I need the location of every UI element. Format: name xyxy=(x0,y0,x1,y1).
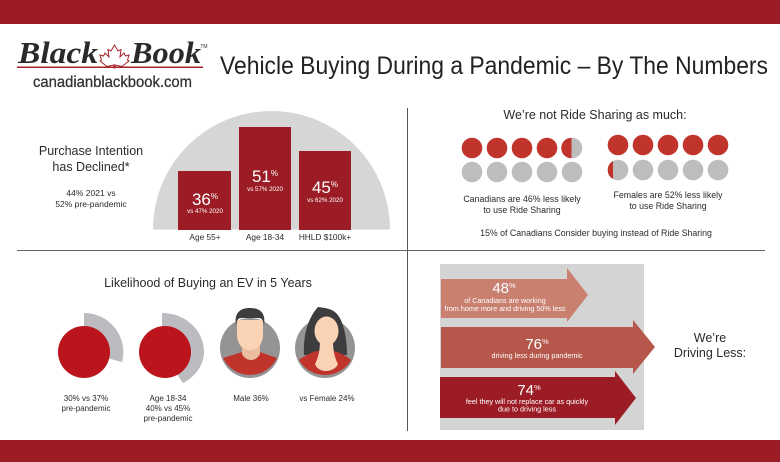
logo: canadianblackbook.com xyxy=(33,74,192,91)
heading: driving less xyxy=(674,331,746,360)
bar: age 18-34: vs 57% 2020 xyxy=(247,186,283,193)
icon: male avatar xyxy=(220,308,280,378)
logo: Book xyxy=(130,35,202,70)
panel: ride sharing xyxy=(462,108,728,238)
bar: age 55+: % xyxy=(211,192,218,201)
chart: age 18-34 40% xyxy=(139,313,204,383)
heading: purchase intention xyxy=(39,144,143,174)
text: female: vs Female 24% xyxy=(299,394,355,403)
heading: driving less: We’re xyxy=(694,331,726,345)
bar: age 18-34: % xyxy=(271,169,278,178)
text: age 18-34 EV: pre-pandemic xyxy=(144,414,192,423)
arrow: 74%: due to driving less xyxy=(498,404,556,414)
chart background: semicircle xyxy=(153,111,390,230)
text: Canadians ride sharing xyxy=(463,194,581,215)
arrow: 48%: from home more and driving 50% less xyxy=(444,304,566,313)
logo: Black xyxy=(17,35,99,70)
bar: HHLD $100k+ xyxy=(299,151,351,230)
panel: purchase intention xyxy=(39,111,390,242)
text: age 18-34 EV: Age 18-34 xyxy=(150,394,187,403)
text: overall EV xyxy=(62,394,110,413)
text: purchase intention detail: 52% pre-pandemic xyxy=(55,199,127,209)
heading: purchase intention: Purchase Intention xyxy=(39,144,143,158)
arrow: 74%: 74 xyxy=(517,382,534,399)
chart: overall 30% xyxy=(58,313,123,378)
text: consider buying: 15% of Canadians Consider buying instead of Ride Sharing xyxy=(480,228,712,238)
chart: Females dots xyxy=(608,135,728,180)
bar: age 55+: vs 47% 2020 xyxy=(187,208,223,215)
text: Females ride sharing: to use Ride Sharing xyxy=(629,201,707,211)
text: purchase intention detail: 44% 2021 vs xyxy=(66,188,116,198)
arrow: 76%: 76 xyxy=(525,336,542,353)
bar: age 55+: 36 xyxy=(192,190,211,209)
bar: HHLD $100k+: % xyxy=(331,180,338,189)
heading: purchase intention: has Declined* xyxy=(52,160,130,174)
bar: age 55+ xyxy=(178,171,231,230)
logo: TM xyxy=(200,44,208,50)
heading: EV likelihood: Likelihood of Buying an EV in 5 Years xyxy=(104,276,312,290)
logo xyxy=(17,35,208,91)
text: male: Male 36% xyxy=(233,394,269,403)
text: purchase intention detail xyxy=(55,188,127,209)
arrow: 48%: 48 xyxy=(492,280,509,297)
panel: driving less xyxy=(440,264,746,430)
icon: female avatar xyxy=(295,307,355,378)
arrow: 74%: % xyxy=(534,383,541,392)
bar: HHLD $100k+: 45 xyxy=(312,178,331,197)
text: overall EV: 30% vs 37% xyxy=(64,394,108,403)
text: Canadians ride sharing: Canadians are 46% less likely xyxy=(463,194,581,204)
bar labels: Age 55+ xyxy=(189,232,221,242)
text: age 18-34 EV xyxy=(144,394,192,423)
arrow: 74% xyxy=(440,371,636,425)
bar labels xyxy=(189,232,351,242)
bar labels: HHLD $100k+ xyxy=(299,232,351,242)
text: Females ride sharing xyxy=(613,190,723,211)
bottom banner xyxy=(0,440,780,462)
arrow: 76%: % xyxy=(542,337,549,346)
bar labels: Age 18-34 xyxy=(246,232,285,242)
top banner xyxy=(0,0,780,24)
arrow: 76% xyxy=(441,320,655,374)
heading: driving less: Driving Less: xyxy=(674,346,746,360)
chart: Canadians dots xyxy=(462,138,582,182)
bar: age 18-34: 51 xyxy=(252,167,271,186)
bar: age 18-34 xyxy=(239,127,291,230)
icon: maple leaf xyxy=(100,45,129,68)
arrow: 48%: % xyxy=(509,281,516,290)
arrow: 48% xyxy=(441,268,588,322)
arrow: 48%: of Canadians are working xyxy=(464,296,546,305)
text: overall EV: pre-pandemic xyxy=(62,404,110,413)
bar: HHLD $100k+: vs 62% 2020 xyxy=(307,197,343,204)
background panel xyxy=(440,264,644,430)
arrow: 76%: driving less during pandemic xyxy=(491,351,583,360)
text: Canadians ride sharing: to use Ride Sharing xyxy=(483,205,561,215)
arrow: 74%: feel they will not replace car as quickly xyxy=(466,397,589,406)
panel: EV likelihood xyxy=(58,276,355,423)
text: age 18-34 EV: 40% vs 45% xyxy=(146,404,190,413)
heading: ride sharing: We’re not Ride Sharing as much: xyxy=(503,108,687,122)
text: Females ride sharing: Females are 52% less likely xyxy=(613,190,723,200)
